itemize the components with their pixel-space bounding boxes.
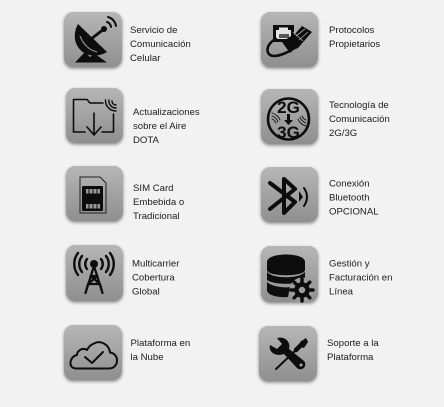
text: Actualizaciones sobre el Aire DOTA: [133, 107, 200, 146]
icon: SIM card: [66, 166, 123, 221]
text: SIM Card Embebida o Tradicional: [133, 183, 184, 222]
icon: folder download: [66, 88, 123, 143]
text: Multicarrier Cobertura Global: [132, 258, 180, 298]
text: Tecnología de Comunicación 2G/3G: [329, 100, 390, 139]
icon: satellite dish: [64, 12, 122, 67]
text: Plataforma en la Nube: la Nube: [130, 352, 164, 363]
text: Gestión y Facturación en Línea: [329, 258, 392, 298]
text: Tecnología de Comunicación 2G/3G: Tecnología de: [329, 100, 389, 111]
text: Conexión Bluetooth OPCIONAL: Bluetooth: [329, 192, 370, 204]
icon: cell tower: [66, 245, 123, 301]
text: Soporte a la Plataforma: Soporte a la: [327, 338, 379, 349]
text: Gestión y Facturación en Línea: Gestión y: [329, 258, 370, 270]
text: Servicio de Comunicación Celular: Servicio de: [130, 25, 177, 36]
text: SIM Card Embebida o Tradicional: Tradicional: [133, 211, 180, 222]
text: Conexión Bluetooth OPCIONAL: Conexión: [329, 178, 370, 190]
text: Soporte a la Plataforma: [327, 338, 379, 363]
text: Gestión y Facturación en Línea: Línea: [329, 286, 354, 298]
text: SIM Card Embebida o Tradicional: Embebida o: [133, 197, 184, 208]
icon: database with gear: [261, 246, 318, 302]
text: Servicio de Comunicación Celular: Comunicación: [130, 39, 191, 50]
text: Servicio de Comunicación Celular: [130, 25, 191, 64]
text: Protocolos Propietarios: Propietarios: [329, 39, 380, 50]
text: Soporte a la Plataforma: Plataforma: [327, 352, 374, 363]
icon: bluetooth: [261, 167, 318, 222]
icon: network cable: [261, 12, 318, 67]
text: Gestión y Facturación en Línea: Facturación en: [329, 272, 392, 284]
icon: cloud with check: [64, 325, 122, 380]
text: Actualizaciones sobre el Aire DOTA: sobre el Aire: [133, 121, 186, 132]
text: Multicarrier Cobertura Global: Multicarrier: [132, 258, 180, 270]
icon: 2G to 3G: 2G: [277, 98, 300, 117]
text: Protocolos Propietarios: [329, 25, 380, 50]
text: Multicarrier Cobertura Global: Global: [132, 286, 160, 298]
text: Servicio de Comunicación Celular: Celular: [130, 53, 161, 64]
text: Tecnología de Comunicación 2G/3G: Comunicación: [329, 114, 390, 125]
text: Tecnología de Comunicación 2G/3G: 2G/3G: [329, 128, 357, 139]
text: Actualizaciones sobre el Aire DOTA: Actualizaciones: [133, 107, 200, 118]
icon: wrench and screwdriver: [259, 326, 317, 381]
text: Multicarrier Cobertura Global: Cobertura: [132, 272, 175, 284]
text: Actualizaciones sobre el Aire DOTA: DOTA: [133, 135, 160, 146]
text: Conexión Bluetooth OPCIONAL: OPCIONAL: [329, 206, 379, 218]
text: Protocolos Propietarios: Protocolos: [329, 25, 375, 36]
text: SIM Card Embebida o Tradicional: SIM Card: [133, 183, 174, 194]
text: Conexión Bluetooth OPCIONAL: [329, 178, 379, 218]
text: Plataforma en la Nube: Plataforma en: [130, 338, 190, 349]
icon: 2G to 3G: 3G: [277, 123, 300, 142]
icon: 2G to 3G: [261, 89, 318, 144]
text: Plataforma en la Nube: [130, 338, 190, 363]
